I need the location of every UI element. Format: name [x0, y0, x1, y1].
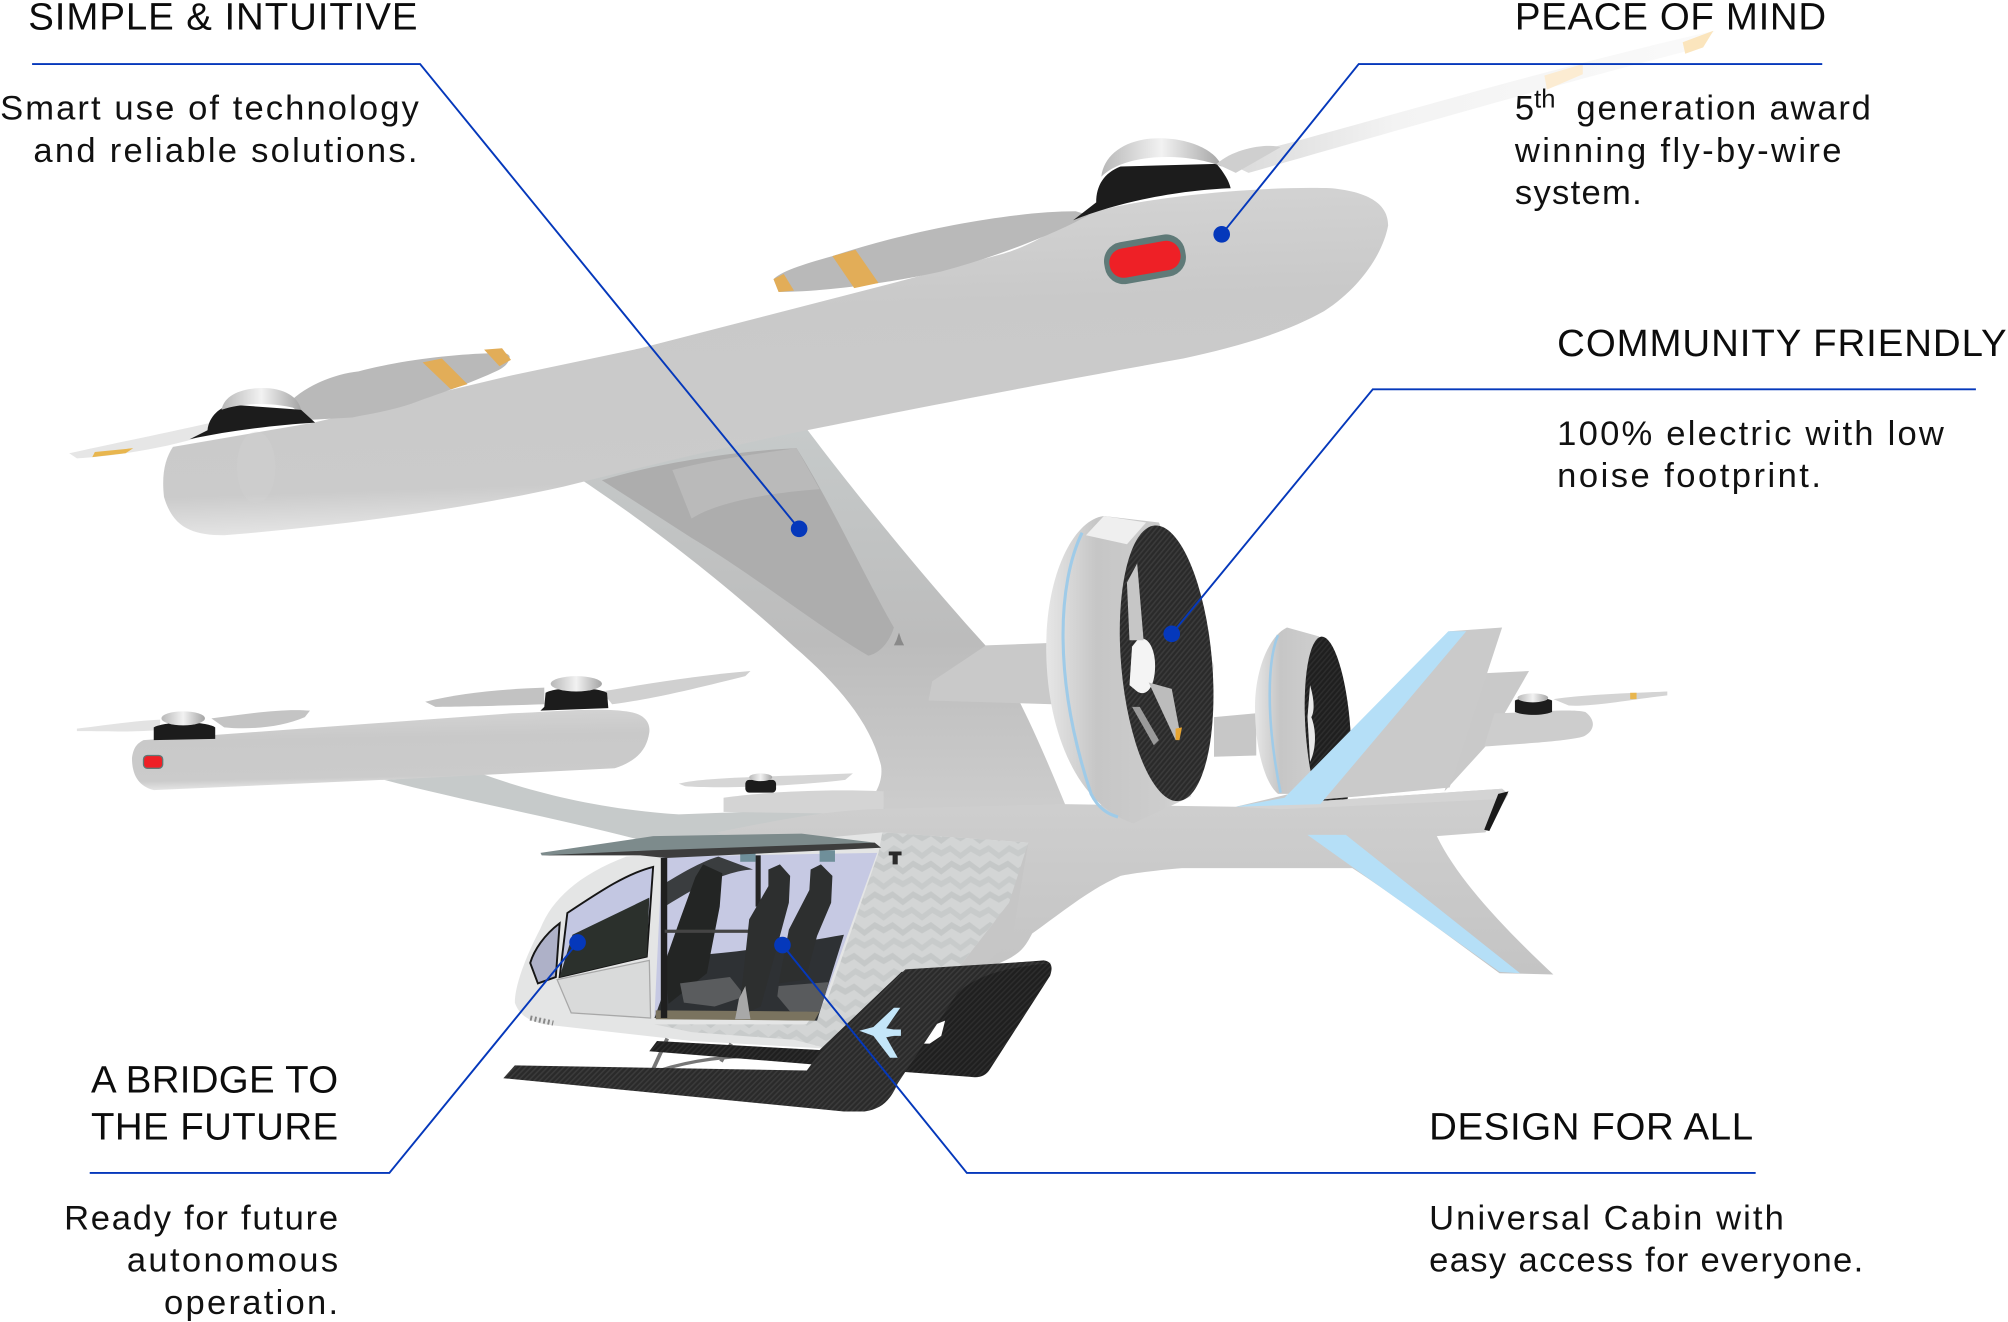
- callout: peace of mind: winning fly-by-wire: [1514, 132, 1841, 170]
- second ducted fan: [1214, 627, 1357, 825]
- callout: simple and intuitive: [0, 0, 807, 537]
- callout: community friendly: COMMUNITY FRIENDLY: [1557, 322, 2007, 365]
- callout: a bridge to the future: autonomous: [127, 1242, 338, 1280]
- icon: airplane logo: [859, 1008, 901, 1058]
- callout: design for all: DESIGN FOR ALL: [1429, 1106, 1753, 1149]
- cabin body: [515, 832, 1028, 1049]
- callout: a bridge to the future: [64, 934, 586, 1322]
- rear row seat: [665, 864, 722, 1004]
- front row seat left: [738, 864, 790, 1017]
- callout: peace of mind: [1213, 0, 1871, 243]
- aircraft illustration: [69, 31, 1715, 1111]
- nav light large: [1101, 231, 1189, 287]
- callout: peace of mind: generation award: [1576, 90, 1871, 128]
- callout: community friendly: 100% electric with low: [1557, 415, 1945, 453]
- open cabin interior with seats: [654, 850, 877, 1021]
- tail boom and underside fin: [717, 789, 1553, 974]
- main upper wing: [163, 188, 1388, 814]
- front lower wing: [77, 671, 750, 790]
- callout: peace of mind: system.: [1515, 174, 1642, 212]
- first ducted fan: [928, 516, 1224, 823]
- callout: simple and intuitive: Smart use of technology: [0, 90, 420, 128]
- open gull-wing door: [540, 834, 902, 864]
- small centre propeller: [679, 773, 853, 793]
- callout: a bridge to the future: A BRIDGE TO: [91, 1058, 338, 1101]
- vertical tail fin: [1236, 627, 1502, 807]
- callout: a bridge to the future: THE FUTURE: [91, 1106, 338, 1149]
- callout: a bridge to the future: operation.: [164, 1284, 338, 1322]
- callout: peace of mind: th: [1534, 86, 1555, 114]
- left propeller on upper wing: [69, 348, 511, 458]
- callout: design for all: easy access for everyone.: [1429, 1242, 1863, 1280]
- callout: design for all: [774, 937, 1863, 1280]
- callout: a bridge to the future: Ready for future: [64, 1199, 338, 1237]
- callout: community friendly: noise footprint.: [1557, 457, 1821, 495]
- rear-right propeller on upper wing: [774, 31, 1715, 292]
- callout: design for all: Universal Cabin with: [1429, 1199, 1784, 1237]
- callout: peace of mind: 5: [1515, 90, 1534, 128]
- carbon fibre landing skids: [503, 960, 1052, 1111]
- front row seat right: [779, 864, 832, 983]
- cockpit windows and door: [530, 867, 653, 1023]
- rear propeller and boom: [1444, 671, 1667, 791]
- landing gear struts: [653, 1038, 765, 1071]
- lower wing strut: [384, 773, 896, 840]
- callout: simple and intuitive: and reliable solutions.: [33, 132, 418, 170]
- callout: community friendly: [1163, 322, 2007, 642]
